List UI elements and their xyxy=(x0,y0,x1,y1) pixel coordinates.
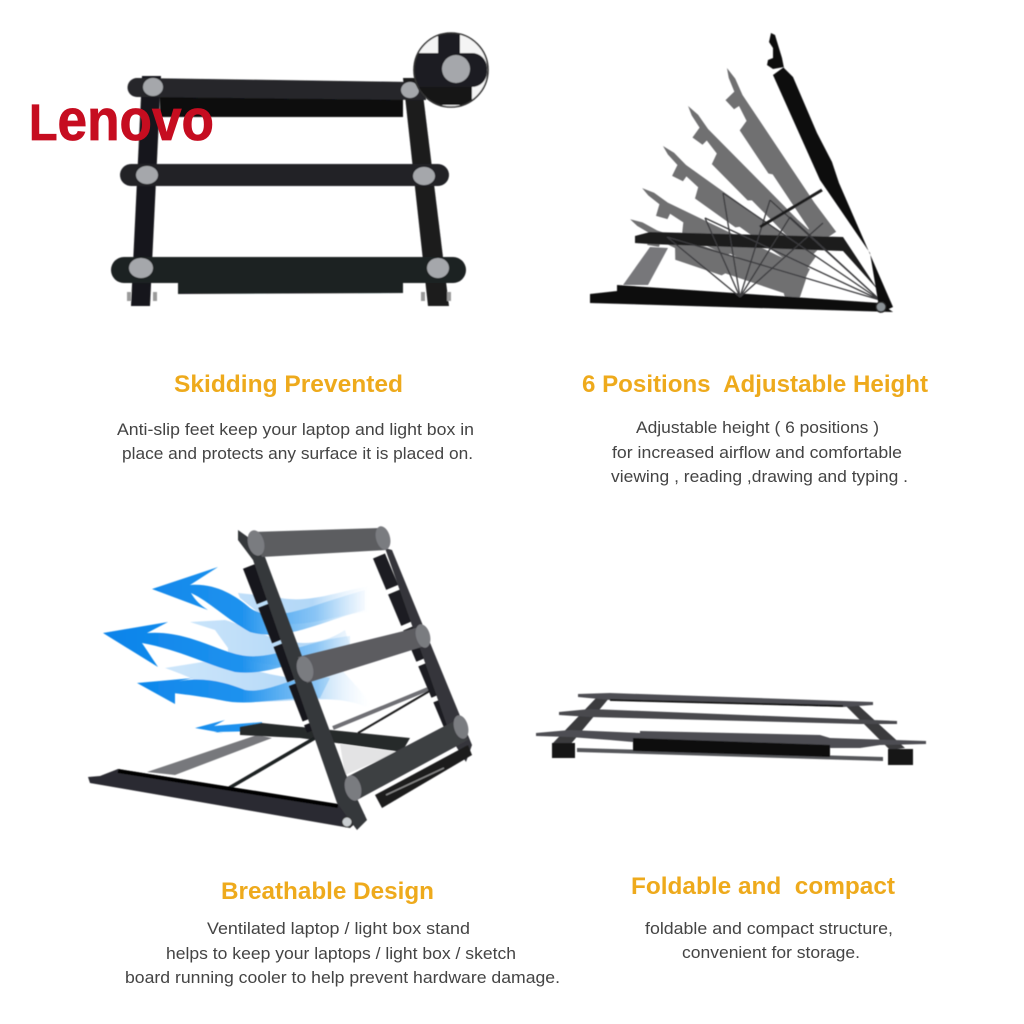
top bar xyxy=(250,528,386,557)
text: adjustable description xyxy=(611,419,908,486)
base rail xyxy=(88,769,365,828)
text: adjustable description: Adjustable height ( 6 positions ) xyxy=(636,419,879,437)
left rail xyxy=(238,530,367,830)
ghost angle positions xyxy=(622,67,837,301)
right rail xyxy=(385,548,472,762)
airflow arrows xyxy=(103,567,372,733)
left leg xyxy=(131,76,161,306)
mid rail xyxy=(635,232,878,290)
left toothed strip xyxy=(250,566,314,730)
image: six height positions fan xyxy=(590,33,893,313)
lower rail xyxy=(577,748,883,761)
middle bar xyxy=(120,164,449,186)
right toothed strip xyxy=(379,556,452,730)
text: adjustable description: viewing , reading ,drawing and typing . xyxy=(611,468,908,486)
rear shadow panel xyxy=(160,96,403,117)
top bar xyxy=(578,693,873,707)
text: breathable description xyxy=(125,920,560,987)
image: flat stand with anti-slip pads xyxy=(111,76,466,306)
text: foldable description xyxy=(645,920,893,962)
text: skidding description: Anti-slip feet keep your laptop and light box in xyxy=(117,421,474,439)
text: breathable description: helps to keep your laptops / light box / sketch xyxy=(166,945,516,963)
feet xyxy=(552,743,575,758)
support wires xyxy=(667,193,880,300)
bottom handle xyxy=(375,745,472,808)
center block xyxy=(633,738,830,757)
gray strut xyxy=(623,247,668,285)
image: breathable stand with airflow arrows xyxy=(88,525,472,830)
feet screws xyxy=(127,292,451,301)
text: foldable description: convenient for storage. xyxy=(682,944,860,962)
bottom bar xyxy=(111,257,466,283)
detail lens: pad close-up xyxy=(412,31,490,109)
base rail xyxy=(590,285,893,312)
side legs xyxy=(553,697,610,745)
anti-slip pads xyxy=(129,78,449,278)
text: adjustable description: for increased airflow and comfortable xyxy=(612,444,902,462)
heading: foldable and compact: Foldable and compact xyxy=(631,873,895,900)
center handle block xyxy=(178,280,403,294)
bar end caps xyxy=(245,525,471,803)
pivot bolt xyxy=(342,817,352,827)
right leg xyxy=(403,78,449,306)
pivot bolt xyxy=(876,302,886,312)
top bar xyxy=(128,78,426,100)
text: breathable description: board running cooler to help prevent hardware damage. xyxy=(125,969,560,987)
lower light panel xyxy=(340,744,398,775)
heading: adjustable height: 6 Positions Adjustable Height xyxy=(582,371,928,398)
heading: skidding prevented: Skidding Prevented xyxy=(174,371,403,398)
middle bar xyxy=(298,627,428,683)
brand logo: Lenovo xyxy=(29,88,214,153)
heading: breathable design: Breathable Design xyxy=(221,878,434,905)
text: skidding description: place and protects any surface it is placed on. xyxy=(122,445,473,463)
gray strut xyxy=(147,735,272,775)
text: skidding description xyxy=(117,421,474,463)
text: breathable description: Ventilated laptop / light box stand xyxy=(207,920,470,938)
image: folded stand xyxy=(536,693,926,765)
main upright arm xyxy=(767,33,893,313)
text: foldable description: foldable and compact structure, xyxy=(645,920,893,938)
mid rail xyxy=(240,723,410,752)
rear brace wires xyxy=(333,687,433,728)
bottom bar xyxy=(347,718,468,800)
second bar xyxy=(559,709,897,724)
third bar xyxy=(536,730,926,748)
